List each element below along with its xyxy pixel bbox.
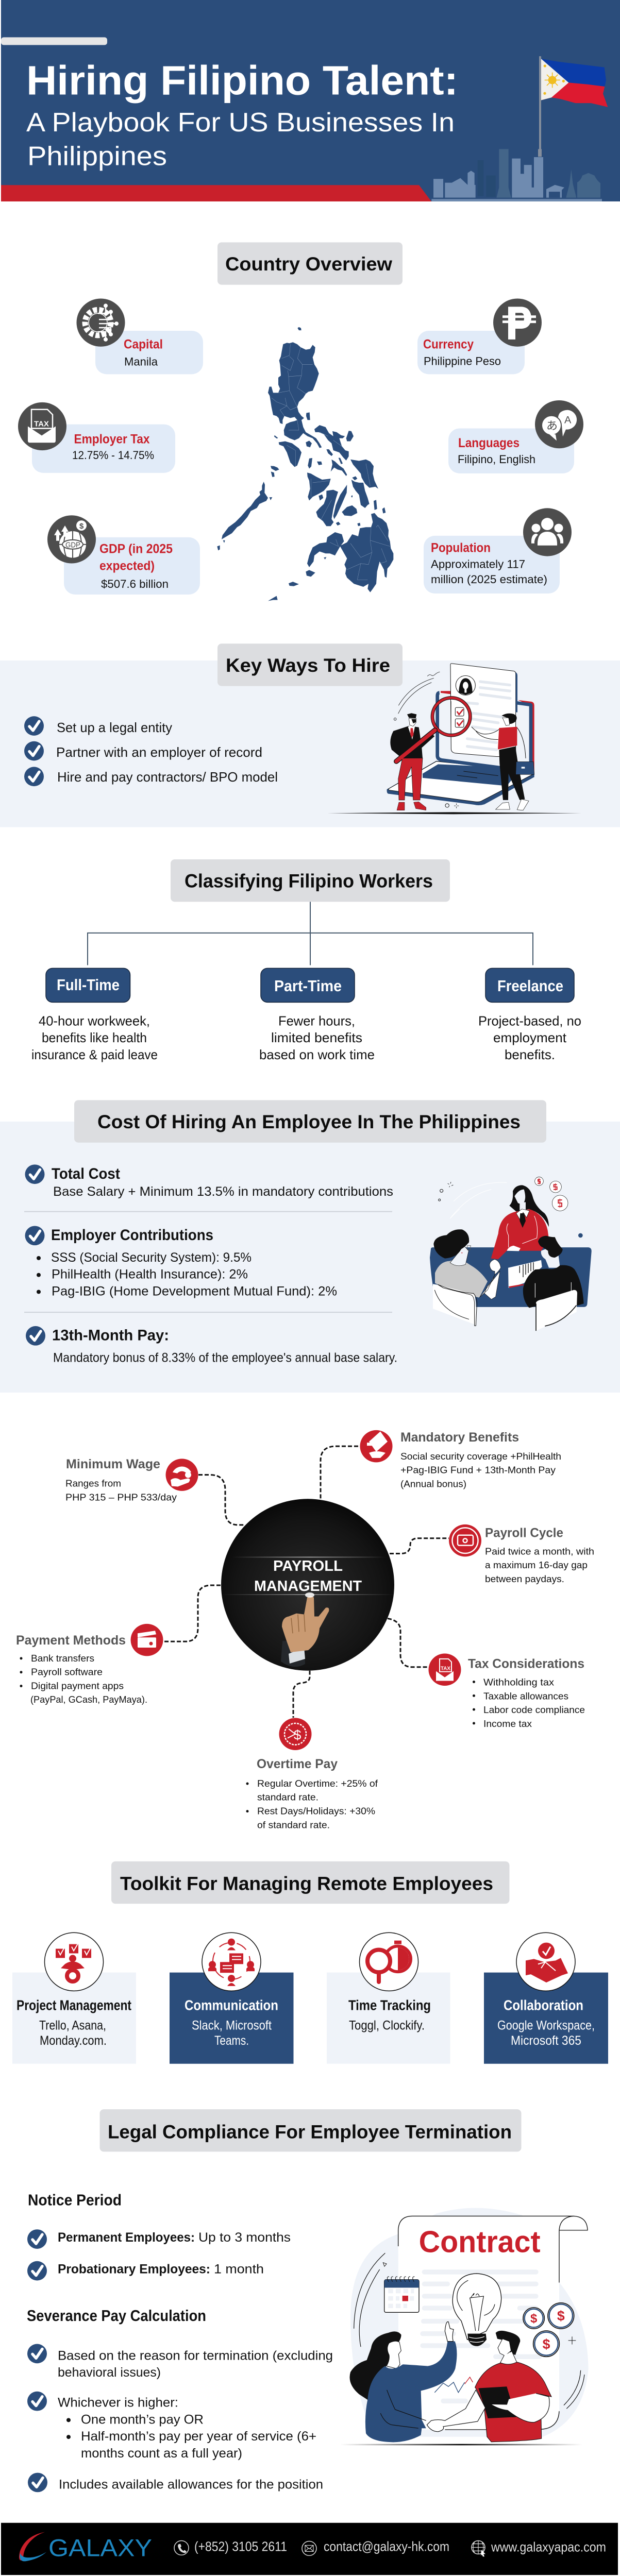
Philippine flag: [541, 59, 608, 107]
item: employer contributions: [25, 1226, 337, 1298]
illustration: contract handshake: $: [530, 2312, 537, 2326]
worker type: Freelance: benefits.: [505, 1048, 555, 1062]
illustration: contract handshake: [340, 2208, 589, 2445]
worker type: Part-Time: based on work time: [259, 1048, 375, 1062]
skyline and flag: [431, 56, 608, 201]
card: GDP: expected): [99, 558, 155, 573]
illustration: contract handshake: Contract: [419, 2225, 541, 2259]
icon: tax envelope: TAX: [441, 1666, 450, 1672]
payroll item: Tax Considerations: Taxable allowances: [483, 1691, 568, 1702]
payroll item: Payment Methods: Payment Methods: [16, 1633, 126, 1648]
toolkit card: Project Management: Project Management: [16, 1997, 131, 2013]
worker type: Freelance: [478, 968, 581, 1062]
block: Severance Pay Calculation: [27, 2307, 333, 2492]
logo: GALAXY: [48, 2534, 152, 2562]
payroll item: Minimum Wage: PHP 315 – PHP 533/day: [65, 1492, 177, 1503]
icon: peso sign: [493, 298, 542, 347]
payroll item: Tax Considerations: Income tax: [483, 1719, 532, 1730]
payroll item: Mandatory Benefits: +Pag-IBIG Fund + 13th-Month Pay: [400, 1465, 556, 1476]
heading: [217, 643, 403, 686]
payroll item: Minimum Wage: [65, 1457, 198, 1503]
worker type: Full-Time: 40-hour workweek,: [39, 1014, 150, 1028]
heading: Key Ways To Hire: [226, 655, 390, 676]
icon: tax envelope: [436, 1659, 454, 1681]
checklist: Hire and pay contractors/ BPO model: [57, 770, 278, 785]
worker type: Full-Time: benefits like health: [42, 1031, 147, 1045]
payroll item: Tax Considerations: [429, 1653, 585, 1730]
icon: team chat: [208, 1939, 255, 1986]
contact: website: [472, 2540, 606, 2556]
icon: speech bubbles: A: [564, 415, 572, 426]
payroll item: Payroll Cycle: Payroll Cycle: [485, 1526, 563, 1540]
payroll item: Payroll Cycle: [449, 1524, 594, 1585]
payroll item: Payment Methods: [16, 1624, 163, 1705]
footer bar: [1, 2523, 618, 2575]
payroll item: Payment Methods: (PayPal, GCash, PayMaya).: [30, 1694, 147, 1705]
toolkit card: Collaboration: [484, 1933, 608, 2064]
toolkit card: Project Management: Monday.com.: [40, 2033, 107, 2048]
block: Severance Pay Calculation: One month’s pay OR: [81, 2412, 204, 2427]
subtitle: Philippines: [27, 141, 167, 171]
toolkit card: Time Tracking: Time Tracking: [348, 1997, 431, 2013]
block: Severance Pay Calculation: Based on the reason for termination (excluding: [58, 2348, 333, 2363]
checklist: [24, 716, 278, 786]
card: Population: million (2025 estimate): [431, 573, 547, 586]
item: total cost: Base Salary + Minimum 13.5% in mandatory contributions: [53, 1184, 393, 1199]
heading: Country Overview: [217, 242, 403, 285]
icon: handshake and check: [526, 1943, 568, 1982]
payroll management hub: [164, 1446, 449, 1718]
card: Capital: [76, 298, 203, 374]
icon: speech bubbles: [535, 400, 583, 448]
header banner: [1, 0, 620, 201]
block: Severance Pay Calculation: months count as a full year): [81, 2446, 242, 2461]
toolkit card: Collaboration: Microsoft 365: [511, 2033, 581, 2048]
illustration: contract handshake: $: [543, 2336, 550, 2352]
payroll item: Overtime Pay: Regular Overtime: +25% of: [257, 1778, 378, 1789]
card: Languages: Languages: [458, 436, 520, 450]
heading: Classifying Filipino Workers: Classifying Filipino Workers: [185, 871, 433, 892]
item: total cost: [25, 1164, 393, 1199]
icon: credit card: [138, 1631, 156, 1648]
item: employer contributions: PhilHealth (Health Insurance): 2%: [52, 1267, 248, 1282]
icon: GDP globe: [47, 515, 96, 563]
toolkit card: Project Management: Trello, Asana,: [39, 2018, 106, 2032]
worker type: Full-Time: [31, 968, 158, 1062]
connector tree: [88, 902, 533, 965]
block: Notice Period: Up to 3 months: [198, 2230, 291, 2245]
icon: GDP globe: $: [79, 522, 84, 531]
title: Hiring Filipino Talent:: [26, 58, 458, 104]
contact: email: contact@galaxy-hk.com: [324, 2539, 449, 2554]
card: Languages: [448, 400, 583, 473]
card: Currency: Currency: [423, 337, 474, 352]
payroll item: Tax Considerations: Tax Considerations: [468, 1657, 584, 1671]
item: employer contributions: Employer Contributions: [51, 1227, 213, 1244]
payroll item: Payroll Cycle: between paydays.: [485, 1574, 564, 1585]
payroll item: Payment Methods: Digital payment apps: [31, 1681, 124, 1691]
worker type: Part-Time: limited benefits: [271, 1031, 362, 1045]
block: Notice Period: 1 month: [214, 2262, 264, 2277]
checklist: Partner with an employer of record: [56, 745, 262, 760]
map of the Philippines: [217, 327, 393, 601]
block: Severance Pay Calculation: Half-month’s pay per year of service (6+: [81, 2429, 316, 2444]
heading: Legal Compliance: Legal Compliance For Employee Termination: [108, 2122, 512, 2143]
icon: cash cycle: [453, 1528, 478, 1553]
contact: website: www.galaxyapac.com: [491, 2540, 606, 2554]
heading: Country Overview: Country Overview: [225, 253, 392, 275]
worker type: Freelance: Freelance: [497, 977, 563, 995]
card: Employer Tax: Employer Tax: [74, 432, 150, 446]
block: Severance Pay Calculation: Whichever is higher:: [58, 2396, 178, 2410]
payroll item: Tax Considerations: Withholding tax: [483, 1677, 555, 1688]
block: Notice Period: Probationary Employees:: [58, 2262, 210, 2277]
block: Notice Period: Notice Period: [28, 2191, 122, 2209]
worker type: Part-Time: Fewer hours,: [278, 1014, 355, 1028]
center circle: [221, 1499, 394, 1671]
card: GDP: $507.6 billion: [101, 578, 169, 590]
card: Currency: [417, 298, 542, 374]
heading: Toolkit: Toolkit For Managing Remote Employees: [120, 1873, 493, 1894]
payroll item: Mandatory Benefits: Social security coverage +PhilHealth: [400, 1451, 561, 1462]
card: Capital: Manila: [124, 355, 158, 368]
payroll item: Payment Methods: Payroll software: [31, 1667, 103, 1678]
payroll item: Mandatory Benefits: Mandatory Benefits: [400, 1430, 519, 1445]
icon: clock dollar: $: [294, 1728, 301, 1743]
block: Notice Period: [27, 2191, 291, 2280]
item: 13th month: [26, 1326, 397, 1365]
toolkit card: Collaboration: Collaboration: [504, 1997, 583, 2013]
block: Severance Pay Calculation: Severance Pay Calculation: [27, 2307, 206, 2325]
icon: gear circuit: [76, 298, 125, 347]
heading: Legal Compliance: [100, 2109, 522, 2151]
card: Population: [424, 508, 572, 594]
skyline: [431, 149, 602, 201]
toolkit card: Collaboration: Google Workspace,: [497, 2018, 595, 2032]
card: Currency: Philippine Peso: [424, 355, 501, 367]
payroll item: Overtime Pay: standard rate.: [257, 1792, 319, 1803]
icon: GDP globe: GDP: [65, 541, 80, 550]
item: employer contributions: SSS (Social Security System): 9.5%: [51, 1250, 252, 1265]
heading: [74, 1100, 546, 1143]
card: GDP: GDP (in 2025: [99, 542, 173, 556]
icon: hand with cash: [367, 1431, 388, 1458]
toolkit card: Communication: [170, 1933, 294, 2064]
contact: email: [302, 2539, 449, 2555]
heading: Classifying Filipino Workers: [171, 859, 450, 902]
subtitle: A Playbook For US Businesses In: [26, 107, 455, 137]
icon: people: [523, 508, 572, 556]
icon: tax envelope: [18, 402, 66, 450]
flag pole: [538, 56, 542, 157]
item: 13th month: 13th-Month Pay:: [52, 1327, 169, 1344]
payroll item: Payroll Cycle: Paid twice a month, with: [485, 1547, 594, 1557]
icon: stopwatch and magnifier: [367, 1941, 411, 1984]
item: total cost: Total Cost: [52, 1165, 120, 1182]
block: Notice Period: Permanent Employees:: [58, 2230, 195, 2245]
card: GDP: [47, 515, 200, 595]
card: Capital: Capital: [124, 337, 163, 352]
payroll item: Payroll Cycle: a maximum 16-day gap: [485, 1560, 588, 1571]
connectors: [164, 1446, 449, 1718]
worker type: Part-Time: Part-Time: [274, 977, 342, 995]
card: Employer Tax: 12.75% - 14.75%: [72, 449, 154, 462]
illustration: hiring review: [326, 664, 581, 814]
icon: tasks and gear: [56, 1942, 92, 1981]
center label: PAYROLL: [273, 1558, 343, 1574]
checklist: Set up a legal entity: [57, 721, 172, 735]
block: Severance Pay Calculation: Includes available allowances for the position: [59, 2477, 323, 2492]
hand pointing: [281, 1592, 329, 1667]
icon: speech bubbles: あ: [546, 417, 558, 433]
panel: Key Ways To Hire: [0, 643, 620, 827]
worker type: Freelance: employment: [493, 1031, 566, 1045]
payroll item: Mandatory Benefits: [360, 1430, 561, 1489]
toolkit card: Communication: Slack, Microsoft: [192, 2018, 272, 2032]
toolkit card: Time Tracking: Toggl, Clockify.: [349, 2018, 425, 2032]
icon: tax envelope: TAX: [34, 420, 49, 429]
payroll item: Overtime Pay: Overtime Pay: [257, 1757, 338, 1771]
illustration: contract handshake: $: [557, 2308, 565, 2324]
worker type: Full-Time: insurance & paid leave: [31, 1048, 158, 1062]
payroll item: Minimum Wage: Ranges from: [65, 1479, 121, 1489]
card: Population: Population: [431, 541, 491, 555]
payroll item: Overtime Pay: Rest Days/Holidays: +30%: [257, 1806, 375, 1817]
payroll item: Payment Methods: Bank transfers: [31, 1653, 94, 1664]
icon: gauge and hand: [171, 1467, 191, 1486]
center label: MANAGEMENT: [254, 1578, 362, 1595]
toolkit card: Communication: Communication: [185, 1997, 278, 2013]
header accent bar: [1, 37, 107, 45]
worker type: Part-Time: [259, 968, 375, 1062]
subtitle: [26, 107, 455, 171]
illustration: meeting: [430, 1177, 592, 1331]
card: Languages: Filipino, English: [458, 453, 535, 466]
payroll item: Minimum Wage: Minimum Wage: [66, 1457, 160, 1471]
heading: Toolkit: [111, 1861, 509, 1904]
toolkit card: Time Tracking: [327, 1933, 450, 2064]
center label: [254, 1558, 362, 1595]
toolkit card: Communication: Teams.: [214, 2033, 249, 2048]
red ribbon: [1, 185, 431, 201]
payroll item: Mandatory Benefits: (Annual bonus): [400, 1479, 466, 1489]
card: Employer Tax: [18, 402, 175, 473]
contact: phone: [174, 2539, 287, 2555]
worker type: Full-Time: Full-Time: [57, 976, 120, 994]
payroll item: Overtime Pay: [246, 1718, 378, 1831]
worker type: Freelance: Project-based, no: [478, 1014, 581, 1028]
panel: Cost Of Hiring: [0, 1100, 620, 1393]
icon: clock dollar: [284, 1723, 306, 1745]
block: Severance Pay Calculation: behavioral issues): [58, 2365, 161, 2380]
item: 13th month: Mandatory bonus of 8.33% of the employee's annual base salary.: [53, 1350, 397, 1365]
payroll item: Tax Considerations: Labor code compliance: [483, 1705, 585, 1716]
contact: phone: (+852) 3105 2611: [194, 2539, 287, 2554]
item: employer contributions: Pag-IBIG (Home Development Mutual Fund): 2%: [52, 1284, 337, 1298]
heading: Cost Of Hiring An Employee In The Philippines: [97, 1111, 521, 1132]
card: Population: Approximately 117: [431, 557, 525, 570]
payroll item: Overtime Pay: of standard rate.: [257, 1820, 330, 1831]
toolkit card: Project Management: [12, 1933, 136, 2064]
logo: [19, 2532, 152, 2562]
